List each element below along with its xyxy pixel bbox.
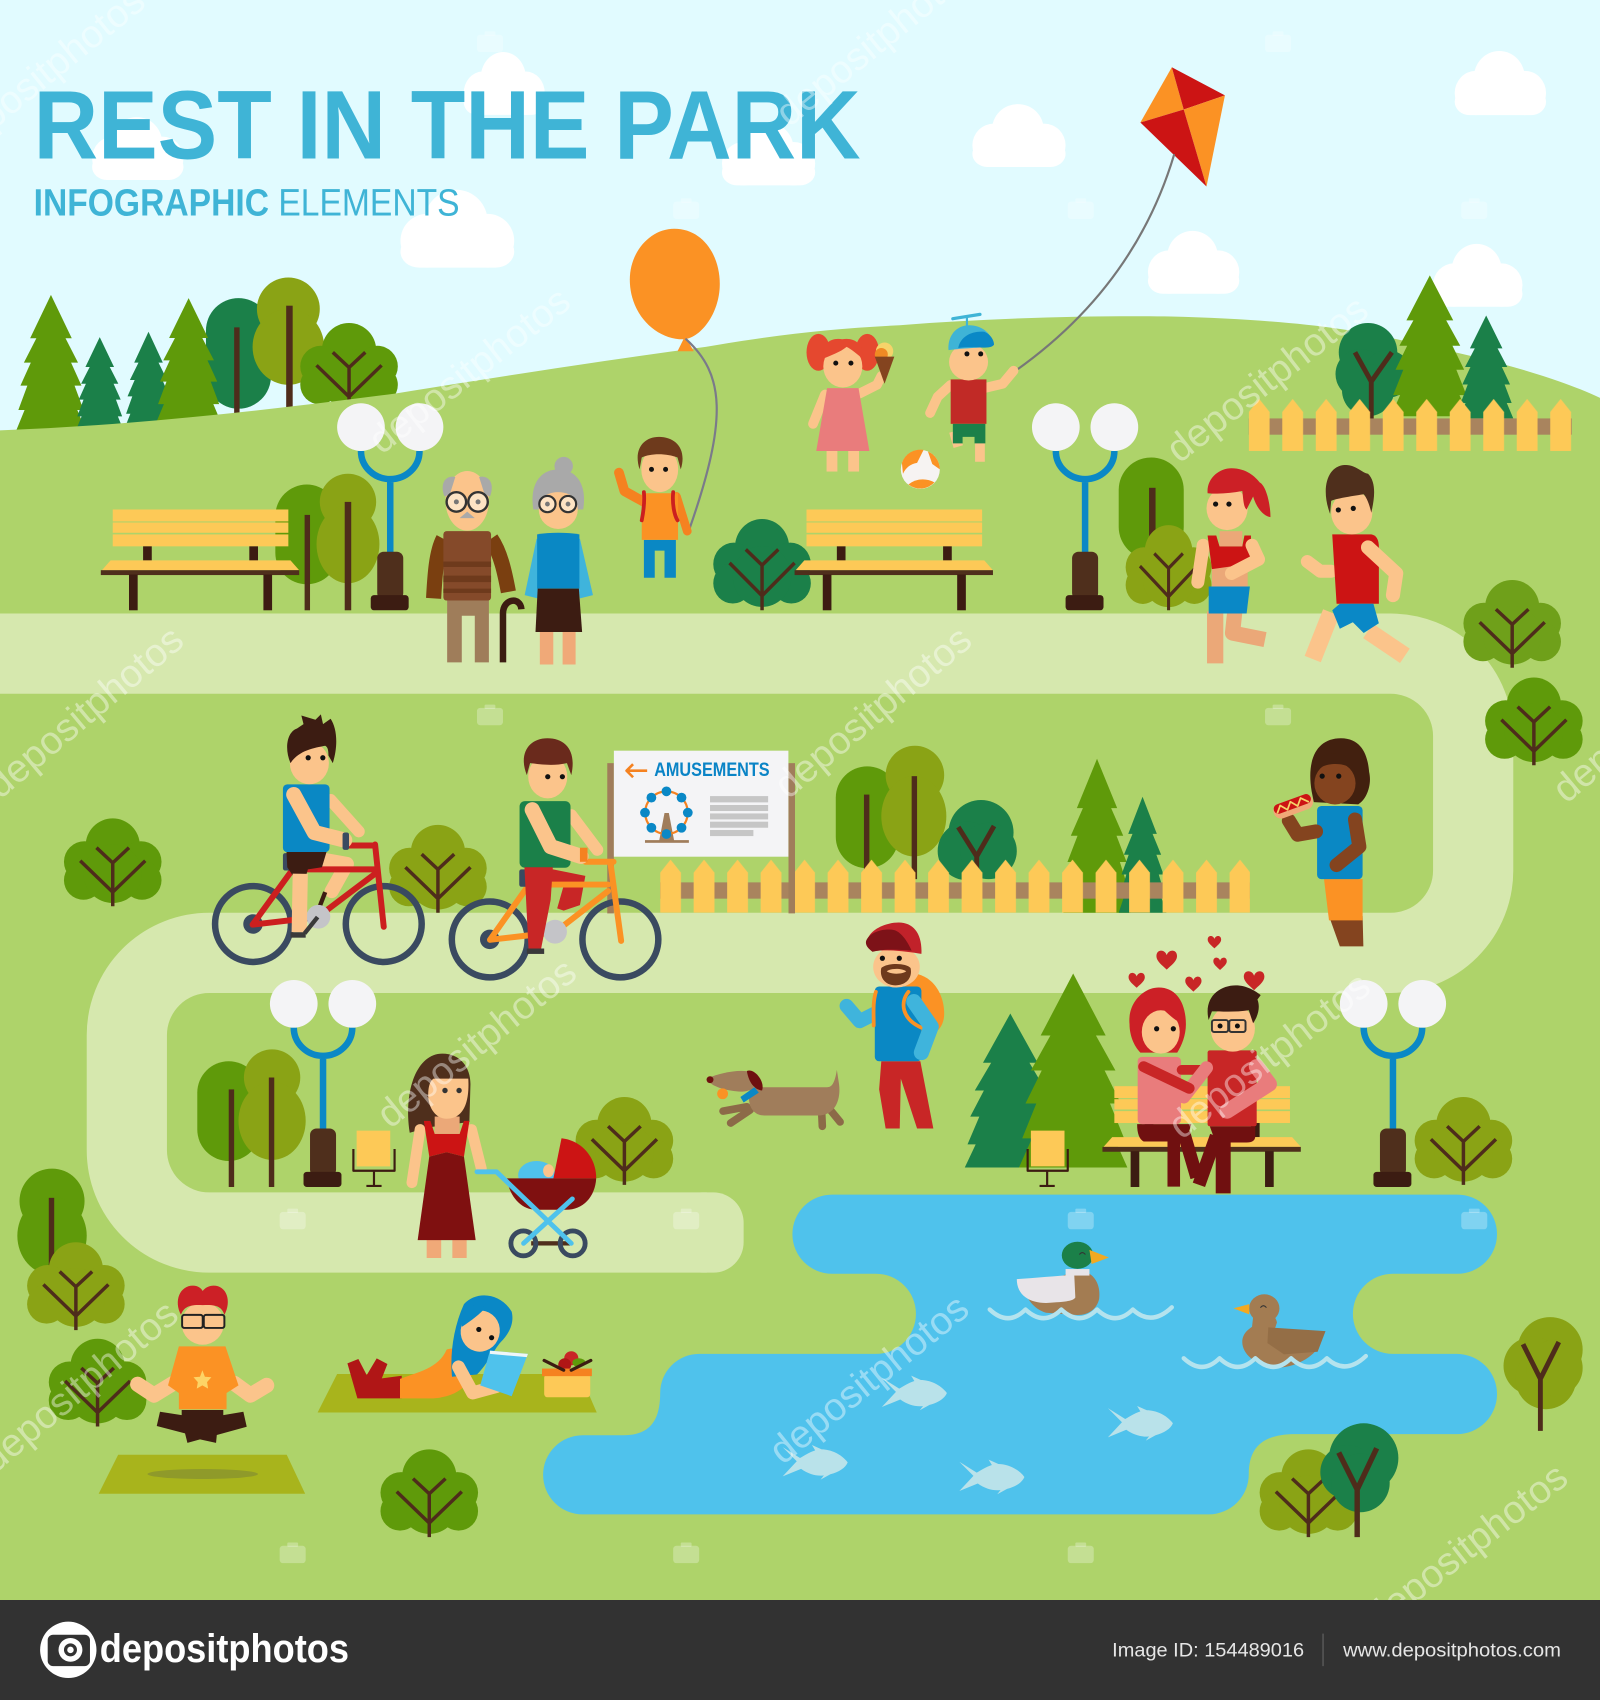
watermark text: depositphotos [1161, 964, 1379, 1147]
hearts [1129, 936, 1264, 992]
pond [543, 1195, 1497, 1514]
footer logo: depositphotos [100, 1627, 349, 1671]
watermark camera marks [280, 31, 1487, 1563]
trees beside left bench [275, 474, 379, 610]
mallard duck [990, 1242, 1172, 1318]
girl with ice cream [807, 334, 894, 472]
forest: top left [16, 278, 398, 430]
watermark text: depositphotos [369, 950, 585, 1137]
brown duck [1184, 1294, 1366, 1368]
boy with balloon [619, 437, 687, 578]
walking path [0, 654, 1473, 1233]
watermark text: depositphotos [1358, 1455, 1576, 1639]
grandmother [525, 457, 593, 664]
hiker [847, 922, 944, 1128]
bench: left [101, 509, 299, 610]
kite [1012, 67, 1225, 373]
image id: Image ID: 154489016 [1112, 1639, 1304, 1661]
mat shadow [147, 1469, 258, 1479]
title: REST IN THE PARK [34, 70, 861, 179]
lamp post: left [337, 403, 443, 610]
ground hill [0, 316, 1600, 1600]
subtitle: INFOGRAPHIC ELEMENTS [34, 183, 460, 225]
cyclist: blue shirt, red bicycle [215, 714, 422, 962]
dog [707, 1070, 840, 1126]
watermark text: depositphotos [361, 279, 579, 462]
bush: lower right [1415, 1097, 1512, 1185]
grandfather [434, 471, 521, 662]
sign: amusements: AMUSEMENTS [654, 760, 770, 781]
couple on bench [1102, 985, 1301, 1193]
cyclist: green shirt, orange bicycle [452, 738, 658, 977]
picnic mat [318, 1374, 597, 1412]
trees behind middle fence [836, 746, 1166, 913]
meditating man [138, 1286, 267, 1443]
girl runner [1198, 468, 1270, 663]
fish [783, 1376, 1173, 1494]
footer logo [40, 1622, 349, 1678]
fence: top right [1249, 399, 1572, 451]
lamp post: right [1032, 403, 1138, 610]
watermark text: depositphotos [1158, 288, 1376, 471]
tree and bush by runners [1119, 457, 1211, 610]
footer bar [0, 1600, 1600, 1700]
lamp post: lower right [1340, 980, 1446, 1187]
bushes: right edge [1463, 580, 1583, 765]
sign: amusements [607, 751, 795, 913]
mother [408, 1054, 481, 1258]
trees: lower left corner [17, 1169, 146, 1427]
tree: right edge [1504, 1317, 1583, 1431]
trees and lamp: lower left [197, 980, 376, 1187]
bush: left of cyclists [64, 818, 162, 906]
picnic basket [542, 1351, 592, 1397]
fence: middle [660, 860, 1250, 913]
bush: by stroller [576, 1097, 673, 1185]
balloon [630, 229, 720, 529]
clouds [92, 51, 1546, 307]
forest: top right [1336, 275, 1513, 421]
waste bin: right [1028, 1131, 1068, 1186]
bush: between cyclists [389, 825, 487, 913]
boy flying kite [930, 314, 1014, 462]
girl reading [347, 1295, 528, 1398]
bush: bottom centre [380, 1449, 478, 1537]
stroller [477, 1138, 596, 1256]
man eating hot dog [1271, 738, 1370, 946]
yoga mat [99, 1455, 305, 1494]
bench: centre [795, 509, 993, 610]
waste bin: left [353, 1131, 395, 1186]
conifers: lower centre [965, 973, 1127, 1167]
path end cap [672, 1192, 744, 1273]
beach ball [901, 450, 940, 489]
boy runner [1307, 465, 1405, 659]
watermark text: depositphotos [761, 1286, 977, 1473]
website: www.depositphotos.com [1342, 1639, 1561, 1661]
watermark text: depositphotos [766, 618, 980, 807]
bush and tree: bottom right [1260, 1423, 1398, 1537]
bush: centre [713, 519, 811, 610]
